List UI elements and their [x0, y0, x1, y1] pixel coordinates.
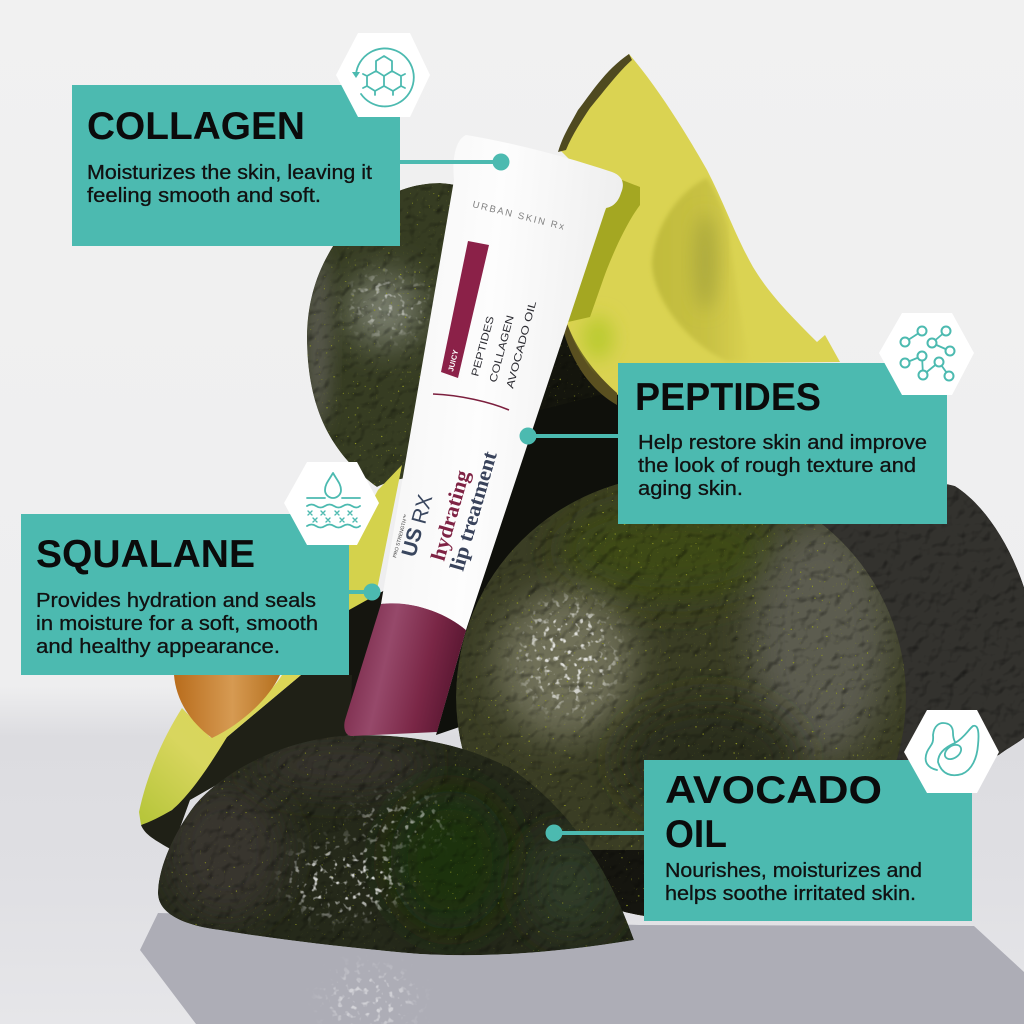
heading: peptides: PEPTIDES — [635, 376, 821, 419]
heading: avocado oil — [665, 769, 882, 856]
USRx logo: RX — [408, 492, 437, 526]
USRx logo: US — [398, 525, 427, 559]
brand text: URBAN SKIN Rx — [471, 199, 565, 233]
avocado slice: lower left — [139, 465, 402, 850]
text: avocado oil: Nourishes, moisturizes and — [665, 860, 922, 882]
photo: avocado pile — [139, 54, 1024, 955]
heading: squalane: SQUALANE — [36, 533, 255, 576]
tube product name — [426, 449, 502, 573]
ingredient list on tube: PEPTIDES — [469, 315, 497, 378]
text: squalane: Provides hydration and seals — [36, 590, 316, 612]
avocado: right back — [790, 482, 1024, 790]
dark gap behind tube — [436, 390, 620, 735]
heading: avocado oil: AVOCADO — [665, 769, 882, 812]
panel: peptides — [618, 363, 947, 524]
product tube — [344, 135, 623, 736]
panel: avocado oil — [644, 760, 972, 921]
USRx logo: PRO STRENGTH™ — [392, 514, 410, 559]
avocado: bottom half — [158, 735, 634, 955]
juicy label: JUICY — [446, 349, 460, 372]
text: squalane: and healthy appearance. — [36, 636, 280, 658]
icon: collagen hexagon — [336, 33, 430, 117]
icon: squalane hexagon — [284, 462, 379, 545]
callout: squalane — [21, 462, 380, 675]
ingredient list on tube: AVOCADO OIL — [504, 300, 539, 390]
icon: peptides hexagon — [879, 313, 974, 395]
heading: collagen: COLLAGEN — [87, 105, 305, 148]
text: collagen: feeling smooth and soft. — [87, 185, 321, 207]
panel: squalane — [21, 514, 349, 675]
text: peptides — [638, 432, 927, 500]
callout: collagen — [72, 33, 510, 246]
text: avocado oil — [665, 860, 922, 905]
juicy label — [441, 241, 489, 378]
tube product name: hydrating — [426, 467, 475, 563]
ingredient list on tube: COLLAGEN — [487, 314, 517, 384]
ingredient list on tube — [469, 300, 539, 390]
text: squalane: in moisture for a soft, smooth — [36, 613, 318, 635]
text: avocado oil: helps soothe irritated skin. — [665, 883, 916, 905]
avocado: upper left — [307, 183, 602, 487]
reflection on table — [140, 913, 1024, 1024]
connector: squalane — [349, 584, 380, 600]
callout: avocado oil — [546, 710, 999, 921]
tube body — [381, 135, 623, 630]
text: collagen: Moisturizes the skin, leaving it — [87, 162, 372, 184]
icon: avocado hexagon — [904, 710, 999, 793]
connector: collagen — [400, 154, 510, 170]
text: squalane — [36, 590, 318, 658]
avocado: large center — [456, 475, 906, 930]
connector: peptides — [520, 428, 618, 444]
text: collagen — [87, 162, 372, 207]
panel: collagen — [72, 85, 400, 246]
text: peptides: Help restore skin and improve — [638, 432, 927, 454]
tube cap — [344, 603, 466, 736]
connector: avocado oil — [546, 824, 644, 842]
tube product name: lip treatment — [445, 449, 502, 573]
text: peptides: the look of rough texture and — [638, 455, 916, 477]
callout: peptides — [520, 313, 974, 524]
heading: avocado oil: OIL — [665, 813, 727, 856]
text: peptides: aging skin. — [638, 478, 743, 500]
USRx logo — [392, 492, 437, 559]
avocado slice: top — [558, 54, 840, 405]
